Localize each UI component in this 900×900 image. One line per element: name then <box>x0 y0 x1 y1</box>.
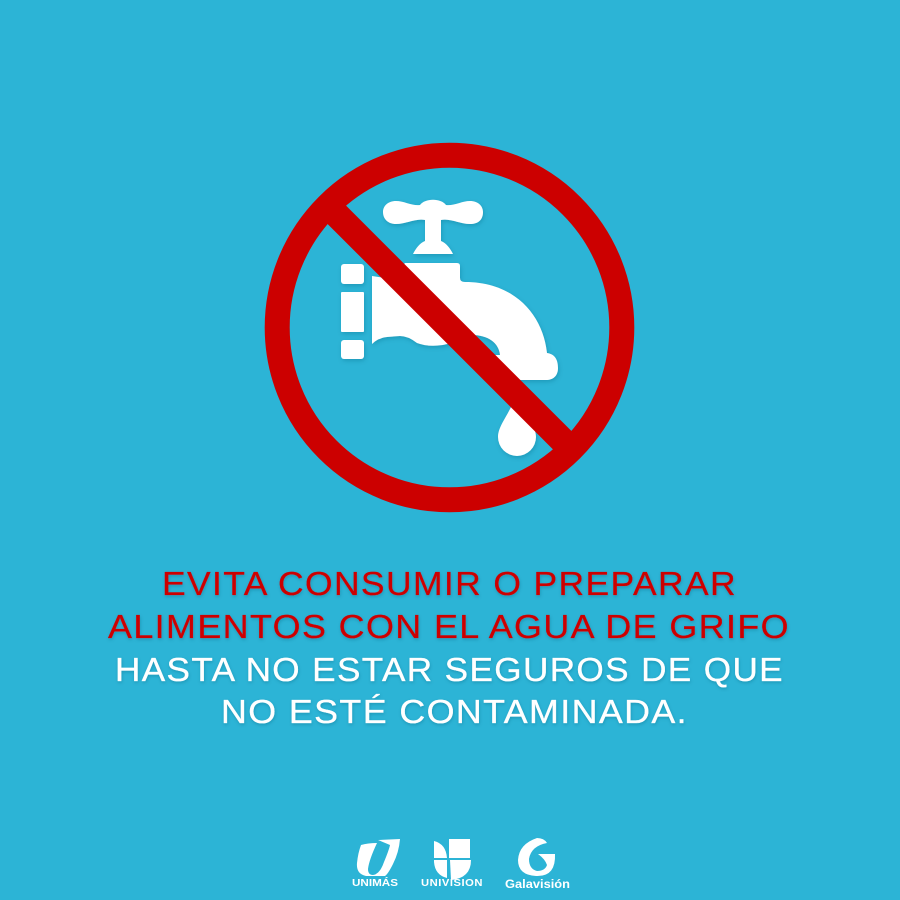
white message line 2: NO ESTÉ CONTAMINADA. <box>221 694 688 731</box>
logo: Galavisión <box>505 838 570 891</box>
water drop <box>498 393 536 456</box>
faucet handle <box>383 200 483 254</box>
pipe flange top <box>341 264 364 284</box>
icon: water faucet <box>341 200 558 456</box>
logos row <box>352 838 570 891</box>
red ring <box>277 155 622 500</box>
logo: UniMás <box>352 839 400 889</box>
logo: Galavisión: Galavisión <box>505 877 570 891</box>
message text <box>108 566 790 731</box>
prohibition sign <box>277 155 622 500</box>
logo: Univision: UNIVISION <box>421 877 483 889</box>
logo: UniMás: UNIMÁS <box>352 876 398 889</box>
white message line 1: HASTA NO ESTAR SEGUROS DE QUE <box>115 652 784 689</box>
red headline line 2: ALIMENTOS CON EL AGUA DE GRIFO <box>108 609 790 646</box>
red diagonal bar <box>328 206 571 449</box>
pipe flange bottom <box>341 340 364 359</box>
pipe flange middle <box>341 292 364 332</box>
logo: Univision <box>421 839 483 889</box>
faucet spout <box>372 263 558 380</box>
red headline line 1: EVITA CONSUMIR O PREPARAR <box>162 566 737 603</box>
